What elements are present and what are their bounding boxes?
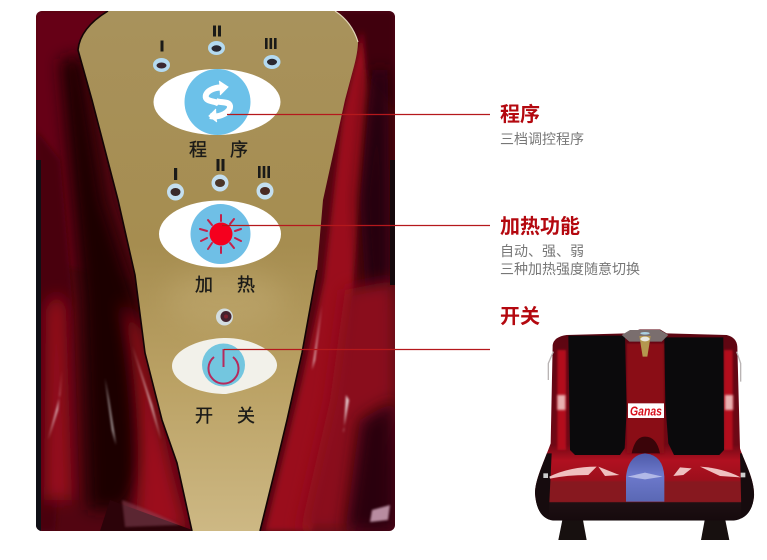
product photo: foot massager xyxy=(530,327,760,540)
description: program: 三档调控程序 xyxy=(500,131,584,147)
description: heating function xyxy=(500,243,640,277)
program label: 程 xyxy=(189,140,207,160)
power indicator light xyxy=(216,308,233,326)
heat level indicators xyxy=(167,159,274,200)
leader line: program xyxy=(227,114,490,116)
heading: heating function: 加热功能 xyxy=(500,215,580,238)
black foot sleeves xyxy=(568,336,724,455)
massager body xyxy=(530,327,760,523)
brand badge: Ganas xyxy=(630,403,662,418)
gold control plate xyxy=(78,11,358,531)
silver side handles xyxy=(548,352,741,382)
leader line: heat xyxy=(222,224,490,226)
program label: 序 xyxy=(230,140,248,160)
icon: cycle arrows xyxy=(206,81,230,122)
icon: power symbol xyxy=(208,349,238,384)
heat label: 热 xyxy=(237,275,255,295)
program button xyxy=(154,69,280,135)
heat label: 加 xyxy=(195,275,213,295)
power label: 开 xyxy=(195,406,213,426)
heading: program: 程序 xyxy=(500,102,540,126)
massager feet xyxy=(558,518,729,540)
icon: red sun xyxy=(200,215,241,253)
power label xyxy=(196,406,254,424)
power label: 关 xyxy=(237,406,255,426)
heat button xyxy=(159,200,281,268)
program label xyxy=(189,140,248,158)
leader line: power xyxy=(224,348,490,350)
description: heating function: 三种加热强度随意切换 xyxy=(500,261,640,277)
red body shading xyxy=(36,11,395,531)
description: heating function: 自动、强、弱 xyxy=(500,243,584,259)
front blue panel xyxy=(626,453,664,502)
program level indicators xyxy=(153,26,280,72)
power button xyxy=(172,338,277,394)
top control panel xyxy=(622,330,668,357)
panel: close-up control panel photo xyxy=(36,11,395,531)
heading: power switch: 开关 xyxy=(500,305,540,328)
glossy highlights xyxy=(48,305,390,527)
heat label xyxy=(195,275,255,295)
